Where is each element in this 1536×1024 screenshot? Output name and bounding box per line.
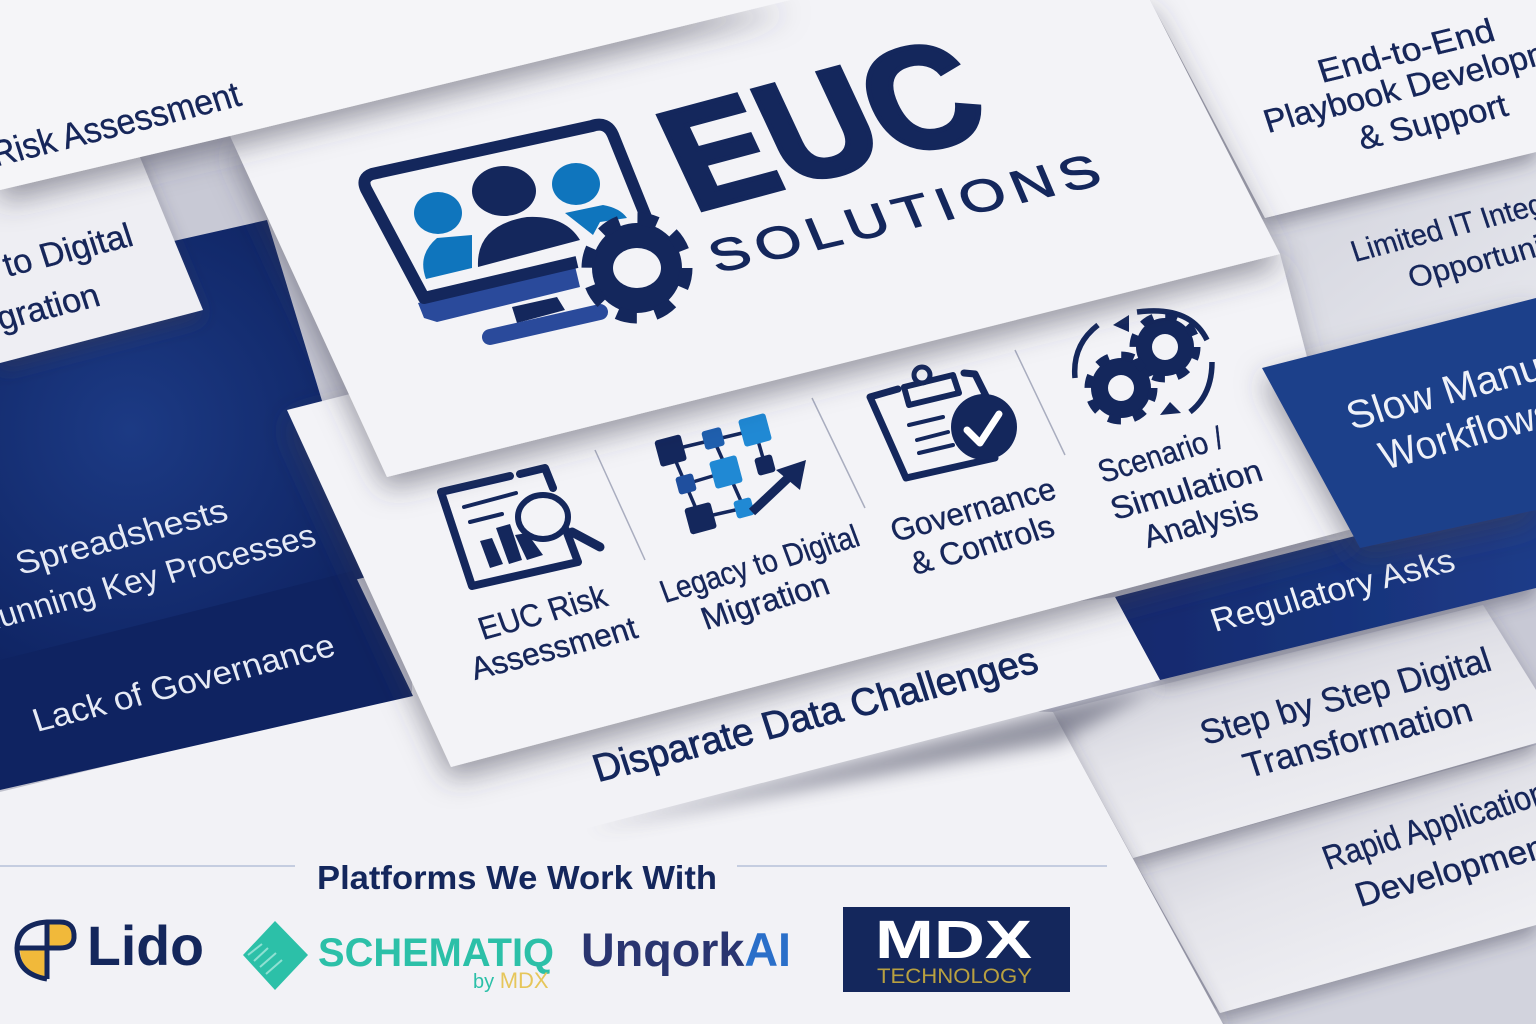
icon: risk report with magnifier	[441, 468, 600, 586]
panel: limited IT integration	[1240, 150, 1536, 540]
text: lack of governance: Lack of Governance	[28, 627, 340, 740]
panel: lowest right sheet	[1210, 925, 1536, 1024]
text: service labels: Legacy to Digital	[655, 518, 864, 610]
text: spreadsheets: Spreadshests	[11, 492, 232, 583]
panel: legacy to digital migration left	[0, 150, 203, 363]
panel: main logo card	[230, 0, 1280, 477]
text: service labels: & Controls	[905, 508, 1059, 582]
text: service labels: Governance	[885, 471, 1060, 549]
text: end-to-end playbook development and support: & Support	[1353, 87, 1512, 158]
panel: platforms we work with	[0, 859, 1107, 993]
panel: end-to-end playbook	[1150, 0, 1536, 218]
dividers	[595, 350, 1065, 560]
panel: services card	[287, 254, 1352, 767]
text: rapid application development	[1317, 774, 1536, 915]
heading: platforms: Platforms We Work With	[317, 859, 717, 896]
icon: legacy to digital network	[654, 413, 806, 535]
title: EUC: EUC	[636, 8, 1008, 241]
panel: regulatory asks	[1115, 490, 1536, 680]
text: end-to-end playbook development and support: End-to-End	[1313, 12, 1499, 91]
panel: rapid application development	[1133, 745, 1536, 1013]
text: service labels	[466, 420, 1267, 687]
text: disparate data challenges: Disparate Data Challenges	[587, 639, 1043, 791]
logo: Schematiq	[243, 921, 554, 993]
shadow below disparate band	[590, 685, 1160, 828]
logo: Lido: Lido	[87, 914, 204, 977]
logo: MDX Technology: MDX	[875, 910, 1032, 970]
panel: step by step digital transformation	[1053, 605, 1536, 858]
logo: UnqorkAI: UnqorkAI	[581, 923, 791, 976]
text: service labels: Assessment	[466, 610, 642, 687]
logo: MDX Technology	[843, 907, 1070, 992]
text: service labels: Simulation	[1106, 452, 1267, 527]
panel: platforms sheet	[0, 692, 1223, 1024]
panel: euc risk assessment top sheet	[0, 0, 790, 190]
subtitle: SOLUTIONS: SOLUTIONS	[700, 143, 1116, 282]
panel: lack of governance	[0, 571, 413, 790]
text: service labels: Scenario /	[1093, 420, 1228, 490]
logo: monitor with people and gear	[364, 125, 686, 337]
logo: Schematiq: SCHEMATIQ	[318, 931, 554, 975]
panel: slow manual workflows	[1262, 298, 1536, 548]
text: regulatory asks: Regulatory Asks	[1206, 542, 1460, 640]
text: step by step digital transformation: Transformation	[1238, 691, 1477, 786]
logo: Lido	[17, 914, 204, 979]
logo: MDX Technology: TECHNOLOGY	[877, 965, 1032, 988]
text: service labels: EUC Risk	[473, 578, 613, 647]
text: service labels: Analysis	[1139, 491, 1262, 555]
logo: Schematiq: by MDX	[473, 968, 549, 993]
icon: clipboard with check	[870, 367, 1017, 478]
panel: spreadsheets running key processes	[0, 220, 375, 665]
icon: scenario gears	[1075, 311, 1212, 420]
text: service labels: Migration	[696, 566, 834, 637]
panel: disparate data challenges	[412, 597, 1160, 837]
text: step by step digital transformation: Step by Step Digital	[1195, 640, 1496, 753]
